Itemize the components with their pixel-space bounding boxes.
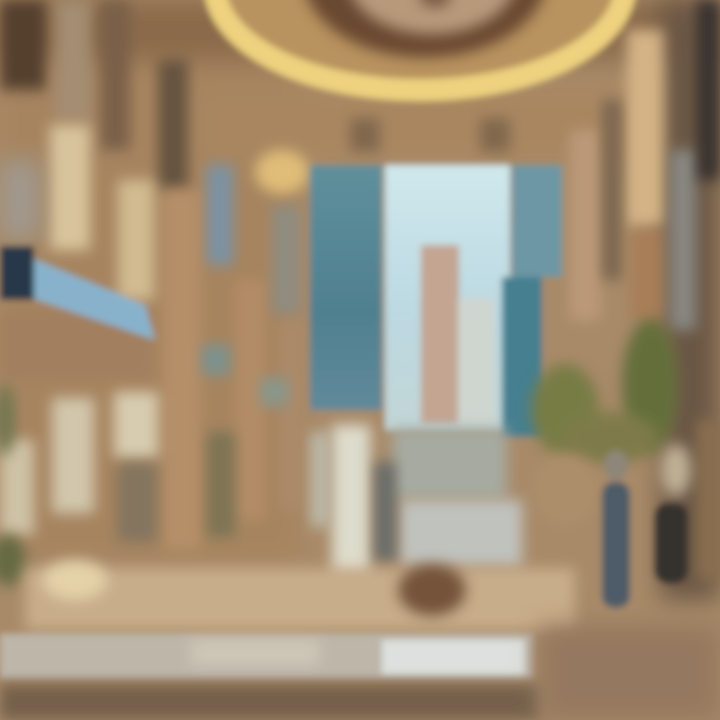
window with sky and towers <box>310 165 562 566</box>
people at right <box>602 444 691 608</box>
left columns and storefronts <box>0 0 302 586</box>
right columns <box>570 0 720 580</box>
floor and table <box>0 560 720 720</box>
ceiling with glowing ring <box>215 0 625 194</box>
icon: blue awning <box>0 246 155 340</box>
white statue figure <box>310 425 396 575</box>
plants <box>531 319 678 526</box>
